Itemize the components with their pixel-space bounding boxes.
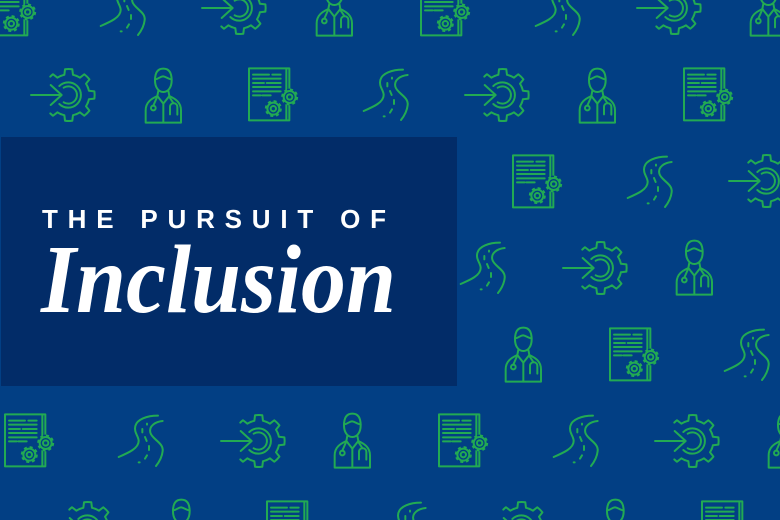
row 6 icons — [50, 500, 751, 520]
row 2 icons — [513, 155, 780, 207]
row 1 icons — [31, 68, 733, 123]
row 0 icons — [0, 0, 780, 36]
title: inclusion: Inclusion — [40, 226, 396, 333]
title: the pursuit of: THE PURSUIT OF — [42, 204, 386, 234]
row 3 icons — [461, 241, 712, 295]
row 4 icons — [506, 328, 769, 382]
row 5 icons — [5, 414, 780, 468]
panel: title background — [1, 137, 457, 386]
